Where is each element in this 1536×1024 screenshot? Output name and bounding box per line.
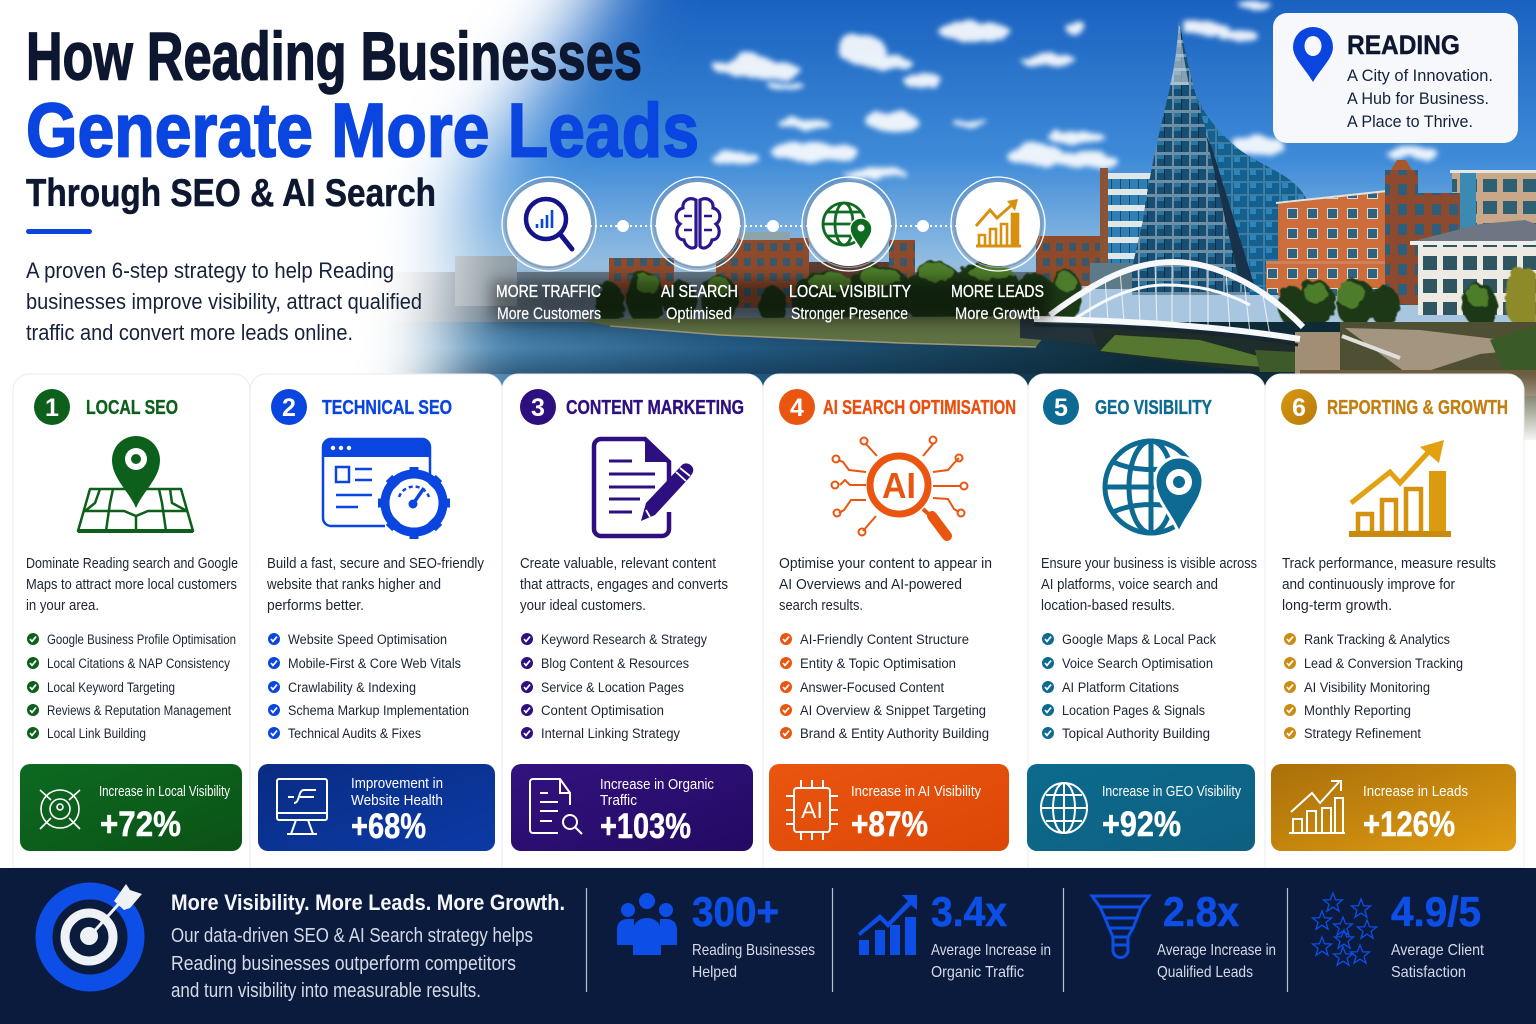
description: Maps to attract more local customers <box>26 577 237 593</box>
tagline body <box>171 925 533 1002</box>
icon: AI chip <box>786 780 838 840</box>
feature list: AI-Friendly Content Structure <box>800 632 969 647</box>
title line 3: Through SEO & AI Search <box>26 172 436 215</box>
description <box>779 556 992 614</box>
icon: target <box>40 790 80 829</box>
description: and continuously improve for <box>1282 577 1455 593</box>
step number: 2 <box>282 394 296 422</box>
value: 4.9/5 <box>1391 888 1481 935</box>
icon: AI magnifier <box>832 436 968 536</box>
stat: organic traffic <box>858 888 1051 981</box>
icon: browser and speed gear <box>323 439 450 539</box>
intro paragraph <box>26 258 422 345</box>
feature list: Strategy Refinement <box>1304 726 1421 741</box>
tagline body: and turn visibility into measurable results. <box>171 980 481 1002</box>
stat label: Increase in Leads <box>1363 784 1468 800</box>
value: 300+ <box>692 888 779 935</box>
stat label: Traffic <box>600 793 637 809</box>
caption: Helped <box>692 964 737 981</box>
heading: AI SEARCH OPTIMISATION <box>823 397 1016 419</box>
description: AI Overviews and AI-powered <box>779 577 962 593</box>
stat value: +92% <box>1102 805 1181 844</box>
stat box: website health <box>258 764 495 851</box>
caption: Average Client <box>1391 942 1484 959</box>
benefit: local visibility <box>789 177 911 323</box>
stat label: Improvement in <box>351 776 443 792</box>
description: that attracts, engages and converts <box>520 577 728 593</box>
feature list: Blog Content & Resources <box>541 656 689 671</box>
label: LOCAL VISIBILITY <box>789 281 911 301</box>
title line 2: Generate More Leads <box>26 88 699 174</box>
stat box: leads <box>1271 764 1516 851</box>
label: MORE LEADS <box>951 281 1044 301</box>
hero photo: Reading skyline <box>382 0 1536 440</box>
panel: step 4 AI search optimisation <box>763 374 1028 868</box>
caption <box>931 942 1051 981</box>
description: Ensure your business is visible across <box>1041 556 1257 572</box>
feature list: AI Visibility Monitoring <box>1304 680 1430 695</box>
heading: GEO VISIBILITY <box>1095 397 1213 419</box>
benefit: more leads <box>951 177 1045 323</box>
step number <box>34 389 70 425</box>
step number: 1 <box>45 394 59 422</box>
step number: 5 <box>1054 394 1068 422</box>
feature list: Google Maps & Local Pack <box>1062 632 1216 647</box>
heading: LOCAL SEO <box>86 397 178 419</box>
heading: TECHNICAL SEO <box>322 397 452 419</box>
description: website that ranks higher and <box>266 577 441 593</box>
stat label: Website Health <box>351 793 443 809</box>
feature list: Location Pages & Signals <box>1062 703 1205 718</box>
feature list: Lead & Conversion Tracking <box>1304 656 1463 671</box>
step number: 4 <box>790 394 804 422</box>
stat label: Increase in GEO Visibility <box>1102 784 1242 800</box>
feature list: Reviews & Reputation Management <box>47 703 231 718</box>
description: Track performance, measure results <box>1282 556 1496 572</box>
icon: globe and pin <box>823 203 872 250</box>
stat label <box>351 776 443 809</box>
description <box>1041 556 1257 614</box>
sublabel: More Growth <box>955 305 1040 323</box>
stat value: +72% <box>100 805 181 844</box>
description <box>266 556 485 614</box>
description: your ideal customers. <box>520 598 646 614</box>
label: MORE TRAFFIC <box>496 281 601 301</box>
panel: step 2 technical SEO <box>250 374 502 868</box>
heading: CONTENT MARKETING <box>566 397 744 419</box>
caption: Average Increase in <box>931 942 1051 959</box>
caption: Organic Traffic <box>931 964 1024 981</box>
description: long-term growth. <box>1282 598 1392 614</box>
feature list: Crawlability & Indexing <box>288 680 416 695</box>
feature list: Mobile-First & Core Web Vitals <box>288 656 461 671</box>
feature list <box>27 632 236 741</box>
icon: document and pencil <box>594 439 693 536</box>
icon: monitor <box>277 779 327 834</box>
step number <box>271 389 307 425</box>
stat box: GEO visibility <box>1027 764 1255 851</box>
feature list: Entity & Topic Optimisation <box>800 656 956 671</box>
feature list: Service & Location Pages <box>541 680 684 695</box>
step number: 3 <box>531 394 545 422</box>
title line 1: How Reading Businesses <box>26 18 642 94</box>
feature list: Voice Search Optimisation <box>1062 656 1213 671</box>
feature list: AI Platform Citations <box>1062 680 1179 695</box>
intro paragraph: businesses improve visibility, attract qualified <box>26 289 422 314</box>
feature list: Answer-Focused Content <box>800 680 944 695</box>
caption: Satisfaction <box>1391 964 1466 981</box>
feature list <box>1042 632 1216 741</box>
sublabel: Optimised <box>666 305 732 323</box>
title <box>26 18 699 215</box>
icon: growth chart <box>1289 781 1345 833</box>
description: search results. <box>779 598 863 614</box>
panel: step 1 local SEO <box>13 374 250 868</box>
stat value: +87% <box>851 805 928 844</box>
stat: qualified leads <box>1092 888 1276 981</box>
location name: READING <box>1347 30 1460 60</box>
feature list: Keyword Research & Strategy <box>541 632 707 647</box>
location tagline: A City of Innovation. <box>1347 66 1493 85</box>
stat value: +126% <box>1363 805 1455 844</box>
tagline heading: More Visibility. More Leads. More Growth. <box>171 890 565 915</box>
stat box: AI visibility <box>769 764 1009 851</box>
feature list: Monthly Reporting <box>1304 703 1411 718</box>
feature list: Local Link Building <box>47 726 146 741</box>
feature list: Rank Tracking & Analytics <box>1304 632 1450 647</box>
description: AI platforms, voice search and <box>1041 577 1218 593</box>
stat value: +103% <box>600 807 691 846</box>
stat box: organic traffic <box>511 764 753 851</box>
icon: star cluster <box>1312 893 1376 965</box>
stat box: local visibility <box>20 764 242 851</box>
description: Dominate Reading search and Google <box>26 556 238 572</box>
caption <box>692 942 815 981</box>
icon: globe and pin <box>1105 441 1203 533</box>
caption <box>1391 942 1484 981</box>
icon: people <box>617 893 677 955</box>
icon: magnifier chart <box>526 199 572 249</box>
feature list <box>268 632 469 741</box>
location tagline <box>1347 66 1493 131</box>
stat: client satisfaction <box>1312 888 1484 981</box>
location tagline: A Hub for Business. <box>1347 89 1489 108</box>
icon: AI chip: AI <box>801 797 823 823</box>
step number <box>520 389 556 425</box>
icon: target and arrow <box>44 884 142 983</box>
description: location-based results. <box>1041 598 1175 614</box>
panel: step 5 GEO visibility <box>1028 374 1265 868</box>
stat label <box>600 777 714 809</box>
feature list: Technical Audits & Fixes <box>288 726 421 741</box>
caption: Average Increase in <box>1157 942 1276 959</box>
intro paragraph: traffic and convert more leads online. <box>26 320 353 345</box>
feature list <box>780 632 989 741</box>
feature list: Schema Markup Implementation <box>288 703 469 718</box>
label: AI SEARCH <box>661 281 738 301</box>
stat label: Increase in Local Visibility <box>99 784 231 800</box>
white content area <box>0 396 1524 868</box>
benefit: more traffic <box>496 177 601 323</box>
feature list: Local Citations & NAP Consistency <box>47 656 230 671</box>
feature list <box>1284 632 1463 741</box>
panel: step 6 reporting and growth <box>1265 374 1524 868</box>
step number <box>1043 389 1079 425</box>
panel: step 3 content marketing <box>502 374 763 868</box>
benefit connector line <box>590 220 960 232</box>
description: performs better. <box>267 598 364 614</box>
benefit: AI search <box>651 177 745 323</box>
stat label: Increase in Organic <box>600 777 714 793</box>
description: Create valuable, relevant content <box>520 556 716 572</box>
icon: growth chart <box>1349 440 1451 537</box>
sublabel: Stronger Presence <box>791 305 908 323</box>
icon: gold growth chart <box>976 199 1021 246</box>
tagline body: Our data-driven SEO & AI Search strategy helps <box>171 925 533 947</box>
description: Build a fast, secure and SEO-friendly <box>267 556 485 572</box>
feature list: Topical Authority Building <box>1062 726 1210 741</box>
feature list: Website Speed Optimisation <box>288 632 447 647</box>
icon: brain <box>676 199 720 248</box>
feature list: Internal Linking Strategy <box>541 726 680 741</box>
feature list: Local Keyword Targeting <box>47 680 175 695</box>
step number <box>1281 389 1317 425</box>
step number <box>779 389 815 425</box>
icon: map and pin <box>78 436 193 531</box>
location tagline: A Place to Thrive. <box>1347 112 1473 131</box>
sublabel: More Customers <box>497 305 601 323</box>
value: 2.8x <box>1163 888 1240 935</box>
description <box>1282 556 1496 614</box>
value: 3.4x <box>931 888 1008 935</box>
icon: funnel <box>1092 896 1149 958</box>
icon: AI magnifier: AI <box>882 465 916 506</box>
feature list: Google Business Profile Optimisation <box>47 632 236 647</box>
feature list: Content Optimisation <box>541 703 664 718</box>
intro paragraph: A proven 6-step strategy to help Reading <box>26 258 394 283</box>
footer band <box>0 868 1536 1024</box>
step number: 6 <box>1292 394 1306 422</box>
location card: Reading <box>1273 13 1518 143</box>
stat label: Increase in AI Visibility <box>851 784 982 800</box>
tagline body: Reading businesses outperform competitors <box>171 953 516 975</box>
description <box>520 556 728 614</box>
description: in your area. <box>26 598 99 614</box>
description <box>26 556 238 614</box>
title underline <box>26 229 92 234</box>
feature list: Brand & Entity Authority Building <box>800 726 989 741</box>
stat value: +68% <box>351 807 426 846</box>
icon: document search <box>530 779 582 834</box>
stat: businesses helped <box>617 888 815 981</box>
description: Optimise your content to appear in <box>779 556 992 572</box>
caption: Qualified Leads <box>1157 964 1253 981</box>
icon: globe <box>1041 783 1087 833</box>
feature list <box>521 632 707 741</box>
icon: bar chart <box>858 895 917 955</box>
caption <box>1157 942 1276 981</box>
feature list: AI Overview & Snippet Targeting <box>800 703 986 718</box>
icon: map pin <box>1293 27 1333 82</box>
caption: Reading Businesses <box>692 942 815 959</box>
